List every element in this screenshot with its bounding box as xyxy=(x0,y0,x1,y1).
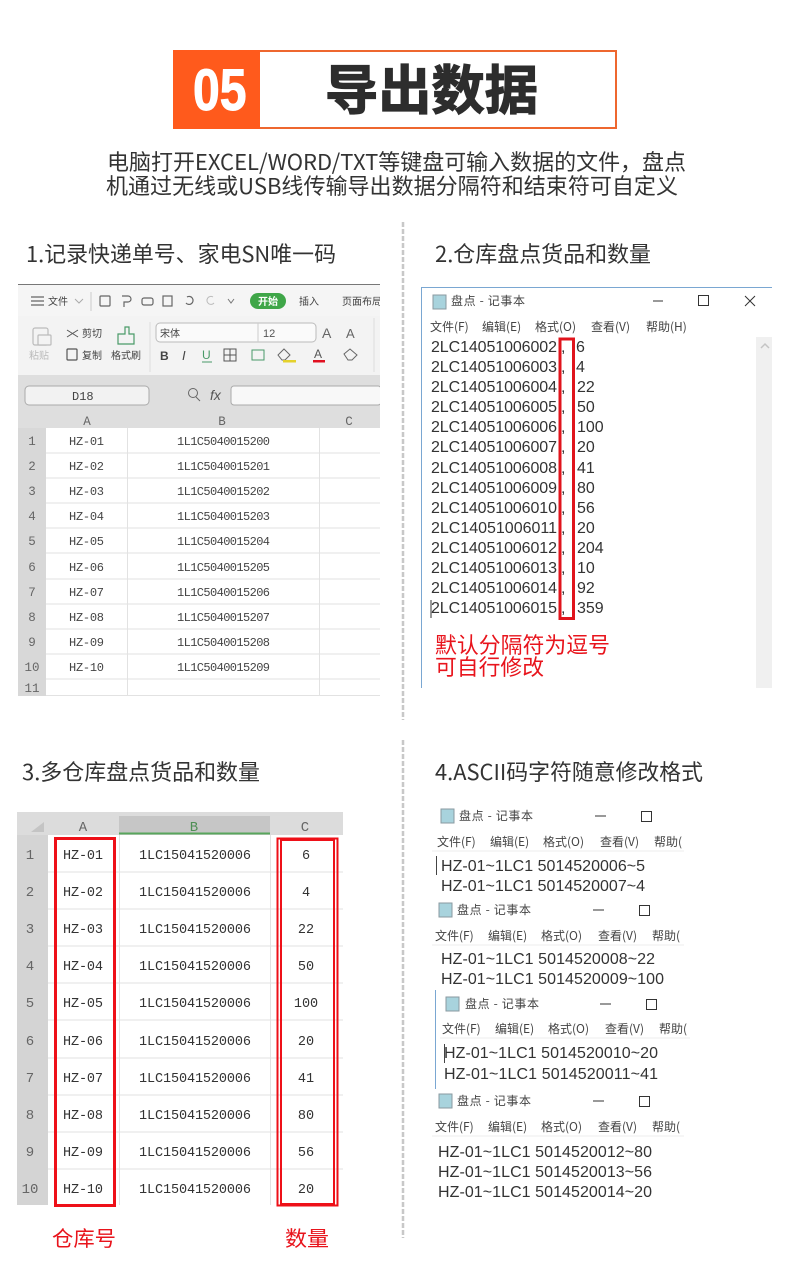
notepad window 1: 编辑(E) xyxy=(490,833,529,850)
table data: 1LC15041520006 xyxy=(139,1109,251,1124)
table data: 1LC15041520006 xyxy=(139,960,251,975)
table data: HZ-05 xyxy=(63,997,103,1012)
table data: 80 xyxy=(298,1109,314,1124)
icon: notepad xyxy=(433,295,446,309)
spreadsheet ribbon: I xyxy=(182,348,186,363)
column headers: B xyxy=(190,820,198,836)
notepad window 2: 文件(F) xyxy=(435,927,474,944)
table data: HZ-05 xyxy=(69,535,104,549)
notepad window 4: HZ-01~1LC1 5014520013~56 xyxy=(438,1164,652,1181)
table data: HZ-04 xyxy=(69,510,104,524)
row headers: 4 xyxy=(28,510,36,524)
data rows: , xyxy=(561,500,565,517)
notepad window 4: HZ-01~1LC1 5014520014~20 xyxy=(438,1184,652,1201)
row headers: 1 xyxy=(26,848,34,864)
table data: HZ-06 xyxy=(69,561,104,575)
title text: 导出数据 xyxy=(325,49,538,125)
notepad window 1: 文件(F) xyxy=(437,833,476,850)
spreadsheet ribbon: 复制 xyxy=(82,347,102,362)
data rows: 2LC14051006013 xyxy=(431,560,557,577)
notepad window 1: 盘点 - 记事本 xyxy=(459,807,533,824)
notepad window 1: 格式(O) xyxy=(543,833,584,850)
column headers xyxy=(18,412,380,429)
data rows: 4 xyxy=(576,359,585,376)
data rows: 2LC14051006007 xyxy=(431,439,557,456)
panel: notepad with comma separator xyxy=(422,288,772,688)
formula bar: D18 xyxy=(72,390,94,404)
notepad window 3: HZ-01~1LC1 5014520010~20 xyxy=(444,1045,658,1062)
notepad window 2: 查看(V) xyxy=(598,927,637,944)
column headers: A xyxy=(79,820,88,836)
notepad window 3: HZ-01~1LC1 5014520011~41 xyxy=(444,1066,658,1083)
data rows: 6 xyxy=(576,339,585,356)
formula bar: fx xyxy=(210,387,222,403)
heading 1: 1.记录快递单号、家电SN唯一码 xyxy=(26,237,336,269)
spreadsheet ribbon: A xyxy=(322,325,332,341)
notepad window 1: HZ-01~1LC1 5014520007~4 xyxy=(441,878,645,895)
spreadsheet ribbon: 格式刷 xyxy=(111,347,141,362)
spreadsheet ribbon: A xyxy=(346,326,355,341)
spreadsheet ribbon: 粘贴 xyxy=(29,347,49,362)
table data: 1LC15041520006 xyxy=(139,997,251,1012)
notepad window 4: 文件(F) xyxy=(435,1118,474,1135)
data rows: 92 xyxy=(577,580,595,597)
label: quantity: 数量 xyxy=(285,1223,329,1253)
spreadsheet menu bar: 插入 xyxy=(299,293,319,308)
spreadsheet ribbon: 12 xyxy=(263,328,275,340)
table data: 1L1C5040015208 xyxy=(177,636,270,650)
row headers: 7 xyxy=(26,1071,34,1087)
table data: 50 xyxy=(298,960,314,975)
data rows: , xyxy=(561,439,565,456)
data rows: 359 xyxy=(577,600,604,617)
notepad window 4: 帮助( xyxy=(652,1118,680,1135)
data rows: 204 xyxy=(577,540,604,557)
panel: spreadsheet with serial numbers xyxy=(18,284,382,696)
table data: 1L1C5040015202 xyxy=(177,485,270,499)
table data: 1L1C5040015203 xyxy=(177,510,270,524)
notepad window 3: 文件(F) xyxy=(442,1020,481,1037)
intro text: 电脑打开EXCEL/WORD/TXT等键盘可输入数据的文件，盘点 xyxy=(107,145,686,177)
table data: 4 xyxy=(302,886,310,901)
notepad window 1: 帮助( xyxy=(654,833,682,850)
table data: 100 xyxy=(294,997,318,1012)
callout: default separator xyxy=(435,628,610,682)
spreadsheet ribbon: 宋体 xyxy=(160,325,180,340)
intro text: 机通过无线或USB线传输导出数据分隔符和结束符可自定义 xyxy=(106,169,678,201)
notepad window 2: 帮助( xyxy=(652,927,680,944)
data rows: 50 xyxy=(577,399,595,416)
scrollbar xyxy=(756,337,772,688)
table data: HZ-01 xyxy=(69,435,104,449)
notepad window 1: HZ-01~1LC1 5014520006~5 xyxy=(441,858,645,875)
row headers: 3 xyxy=(28,485,36,499)
notepad menu: 帮助(H) xyxy=(646,318,687,335)
notepad window 2: 格式(O) xyxy=(541,927,582,944)
notepad window 2: HZ-01~1LC1 5014520009~100 xyxy=(441,971,664,988)
notepad window 2: 编辑(E) xyxy=(488,927,527,944)
data rows: 2LC14051006011 xyxy=(431,520,557,537)
data rows: 10 xyxy=(577,560,595,577)
data rows: 20 xyxy=(577,520,595,537)
row headers: 8 xyxy=(28,611,36,625)
data rows: 56 xyxy=(577,500,595,517)
panel: multi-warehouse spreadsheet xyxy=(17,812,343,1253)
red highlight: column A xyxy=(56,838,114,1206)
notepad window 4: 查看(V) xyxy=(598,1118,637,1135)
table data: HZ-08 xyxy=(63,1109,103,1124)
table data: HZ-07 xyxy=(69,586,104,600)
data rows: 2LC14051006010 xyxy=(431,500,557,517)
notepad window 3: 查看(V) xyxy=(605,1020,644,1037)
callout: default separator: 默认分隔符为逗号 xyxy=(435,628,610,660)
notepad window 2: 盘点 - 记事本 xyxy=(457,901,531,918)
row headers: 1 xyxy=(28,435,36,449)
row headers: 7 xyxy=(28,586,36,600)
data rows: , xyxy=(561,460,565,477)
table data: HZ-03 xyxy=(63,923,103,938)
data rows: , xyxy=(561,560,565,577)
table data: 1L1C5040015207 xyxy=(177,611,270,625)
notepad window 4: 编辑(E) xyxy=(488,1118,527,1135)
title banner xyxy=(173,49,616,129)
row headers: 6 xyxy=(28,561,36,575)
spreadsheet menu bar xyxy=(18,284,382,316)
notepad window 2 xyxy=(432,901,684,988)
heading 2: 2.仓库盘点货品和数量 xyxy=(435,237,651,269)
notepad window 3: 格式(O) xyxy=(548,1020,589,1037)
data rows: 2LC14051006003 xyxy=(431,359,557,376)
table data: HZ-07 xyxy=(63,1072,103,1087)
row headers: 11 xyxy=(24,682,40,696)
table data: HZ-09 xyxy=(69,636,104,650)
spreadsheet menu bar: 文件 xyxy=(48,293,68,308)
heading 3: 3.多仓库盘点货品和数量 xyxy=(22,755,260,787)
table data: 56 xyxy=(298,1146,314,1161)
notepad window 3 xyxy=(436,990,690,1089)
table data: 1LC15041520006 xyxy=(139,1035,251,1050)
callout: default separator: 可自行修改 xyxy=(435,650,544,682)
data rows: , xyxy=(561,399,565,416)
table data: HZ-10 xyxy=(69,661,104,675)
data rows: , xyxy=(561,339,565,356)
table data: 1LC15041520006 xyxy=(139,923,251,938)
spreadsheet ribbon: 剪切 xyxy=(82,325,102,340)
window controls xyxy=(653,296,755,306)
row headers: 2 xyxy=(26,885,34,901)
notepad window 3: 盘点 - 记事本 xyxy=(465,995,539,1012)
notepad menu: 格式(O) xyxy=(535,318,576,335)
data rows: 20 xyxy=(577,439,595,456)
row headers: 4 xyxy=(26,959,34,975)
table data: 1LC15041520006 xyxy=(139,849,251,864)
table data: 1L1C5040015209 xyxy=(177,661,270,675)
spreadsheet ribbon: A xyxy=(314,347,322,361)
column headers: A xyxy=(83,415,91,429)
row headers: 3 xyxy=(26,922,34,938)
row headers: 9 xyxy=(28,636,36,650)
data rows: , xyxy=(561,580,565,597)
row headers: 6 xyxy=(26,1034,34,1050)
window title: 盘点 - 记事本 xyxy=(451,292,525,309)
table data: 41 xyxy=(298,1072,314,1087)
row headers: 5 xyxy=(28,535,36,549)
table data: HZ-08 xyxy=(69,611,104,625)
table data xyxy=(69,435,270,675)
label: warehouse number: 仓库号 xyxy=(52,1223,116,1253)
row headers xyxy=(18,428,46,696)
column headers: B xyxy=(218,415,226,429)
data rows: 2LC14051006005 xyxy=(431,399,557,416)
table data xyxy=(63,849,318,1198)
table data: 1LC15041520006 xyxy=(139,886,251,901)
heading 4: 4.ASCII码字符随意修改格式 xyxy=(435,755,703,787)
table data: HZ-04 xyxy=(63,960,103,975)
data rows: , xyxy=(561,520,565,537)
row headers xyxy=(17,835,48,1205)
notepad window 4: 格式(O) xyxy=(541,1118,582,1135)
section number 05 xyxy=(173,50,260,129)
data rows: , xyxy=(561,480,565,497)
notepad window 4: 盘点 - 记事本 xyxy=(457,1092,531,1109)
notepad window 3: 编辑(E) xyxy=(495,1020,534,1037)
row headers: 2 xyxy=(28,460,36,474)
table data: 1L1C5040015205 xyxy=(177,561,270,575)
table data: 1L1C5040015200 xyxy=(177,435,270,449)
data rows: 41 xyxy=(577,460,595,477)
notepad window 3: 帮助( xyxy=(659,1020,687,1037)
column headers: C xyxy=(301,820,309,836)
row headers: 10 xyxy=(24,661,40,675)
data rows: 2LC14051006009 xyxy=(431,480,557,497)
table data: 20 xyxy=(298,1183,314,1198)
data rows: , xyxy=(561,359,565,376)
table data: HZ-01 xyxy=(63,849,103,864)
data rows: , xyxy=(561,379,565,396)
intro text xyxy=(106,145,686,201)
notepad menu xyxy=(430,318,687,335)
data rows: 2LC14051006012 xyxy=(431,540,557,557)
table data: 1L1C5040015201 xyxy=(177,460,270,474)
notepad window 2: HZ-01~1LC1 5014520008~22 xyxy=(441,951,655,968)
data rows: , xyxy=(561,419,565,436)
table data: 1LC15041520006 xyxy=(139,1183,251,1198)
table data: HZ-06 xyxy=(63,1035,103,1050)
data rows: , xyxy=(561,540,565,557)
data rows: 100 xyxy=(577,419,604,436)
spreadsheet ribbon: B xyxy=(160,349,169,363)
formula bar xyxy=(18,375,381,412)
column headers xyxy=(17,812,343,836)
table data: HZ-02 xyxy=(69,460,104,474)
data rows: 2LC14051006002 xyxy=(431,339,557,356)
notepad menu: 查看(V) xyxy=(591,318,630,335)
notepad menu: 文件(F) xyxy=(430,318,469,335)
data rows: 2LC14051006004 xyxy=(431,379,557,396)
table data: 20 xyxy=(298,1035,314,1050)
table data: 6 xyxy=(302,849,310,864)
data rows: 80 xyxy=(577,480,595,497)
table data: 1LC15041520006 xyxy=(139,1146,251,1161)
data rows: 2LC14051006006 xyxy=(431,419,557,436)
data rows: 22 xyxy=(577,379,595,396)
notepad window 4: HZ-01~1LC1 5014520012~80 xyxy=(438,1144,652,1161)
data rows: , xyxy=(561,600,565,617)
table data: 22 xyxy=(298,923,314,938)
table data: HZ-10 xyxy=(63,1183,103,1198)
table data: HZ-02 xyxy=(63,886,103,901)
spreadsheet menu bar: 页面布局 xyxy=(342,293,382,308)
panel: ASCII format notepads xyxy=(432,807,690,1201)
table data: 1L1C5040015204 xyxy=(177,535,270,549)
section number 05: 05 xyxy=(193,59,247,123)
table data: 1LC15041520006 xyxy=(139,1072,251,1087)
notepad window 4 xyxy=(432,1092,684,1201)
notepad menu: 编辑(E) xyxy=(482,318,521,335)
red highlight: column C xyxy=(278,838,338,1206)
row headers: 10 xyxy=(22,1182,38,1198)
data rows: 2LC14051006008 xyxy=(431,460,557,477)
table data: HZ-09 xyxy=(63,1146,103,1161)
table data: HZ-03 xyxy=(69,485,104,499)
red highlight: separator column xyxy=(560,339,574,618)
notepad window 1 xyxy=(432,807,684,895)
spreadsheet menu bar: 开始 xyxy=(258,293,278,308)
column headers: C xyxy=(345,415,353,429)
row headers: 8 xyxy=(26,1108,34,1124)
spreadsheet ribbon: U xyxy=(202,348,211,362)
spreadsheet ribbon xyxy=(18,316,380,375)
table data: 1L1C5040015206 xyxy=(177,586,270,600)
row headers: 5 xyxy=(26,996,34,1012)
data rows: 2LC14051006015 xyxy=(431,600,557,617)
data rows: 2LC14051006014 xyxy=(431,580,557,597)
notepad window 1: 查看(V) xyxy=(600,833,639,850)
data rows xyxy=(431,339,604,618)
row headers: 9 xyxy=(26,1145,34,1161)
